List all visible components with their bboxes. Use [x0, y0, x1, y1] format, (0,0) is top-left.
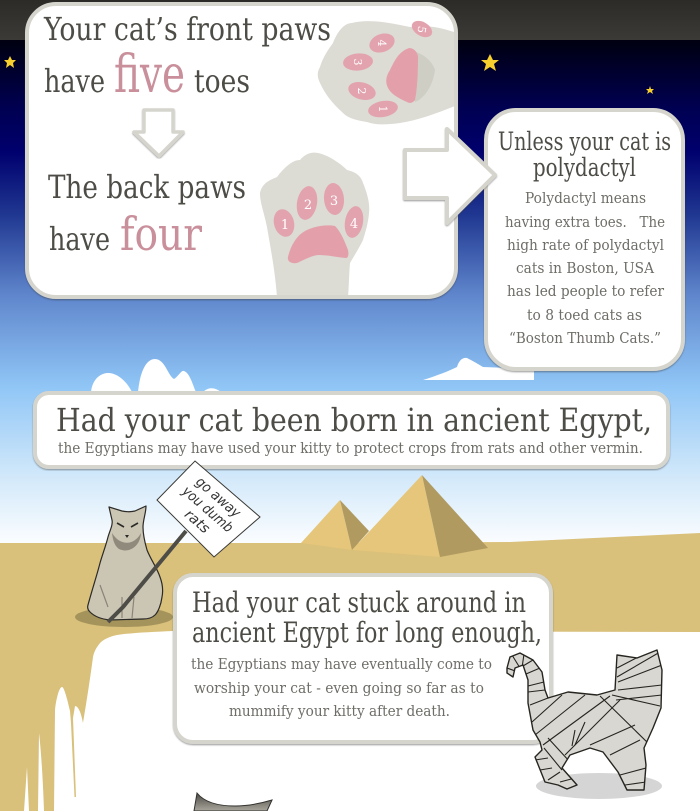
text: have four: have [49, 220, 110, 258]
pyramids [301, 475, 488, 557]
clouds [91, 358, 534, 392]
polydactyl body text: high rate of polydactyl [507, 236, 664, 254]
sign: go away [192, 474, 244, 522]
mummify heading [192, 586, 542, 649]
polydactyl body text: to 8 toed cats as [527, 306, 642, 324]
title: back paws: The back paws [48, 168, 246, 206]
icon: front paw: 3 [351, 58, 364, 66]
stars [4, 54, 654, 94]
polydactyl body text: has led people to refer [507, 282, 665, 300]
polydactyl body text: having extra toes. The [505, 213, 665, 231]
polydactyl body text: Polydactyl means [525, 189, 646, 207]
stick [108, 531, 186, 622]
text: have five toes: have [44, 62, 105, 100]
sign [157, 461, 260, 557]
icon: back paw: 4 [350, 217, 358, 232]
panel: polydactyl [486, 110, 683, 369]
mummify body text: the Egyptians may have eventually come to [191, 655, 492, 673]
title: front paws: Your cat’s front paws [43, 10, 331, 48]
banner subtext: the Egyptians may have used your kitty to protect crops from rats and other vermin. [58, 439, 643, 457]
panel: ancient Egypt banner [35, 393, 668, 467]
mummify body text [191, 655, 492, 720]
sign: rats [181, 507, 213, 537]
mummify heading: Had your cat stuck around in [192, 586, 526, 619]
text: have four [49, 207, 202, 261]
icon: back paw: 3 [330, 194, 338, 209]
icon: front paw: 1 [376, 106, 389, 112]
sign: you dumb [178, 483, 236, 536]
icon: front paw: 4 [375, 40, 388, 46]
mummify heading: ancient Egypt for long enough, [192, 616, 542, 649]
mummify body text: mummify your kitty after death. [229, 702, 450, 720]
mummify body text: worship your cat - even going so far as to [194, 679, 484, 697]
panel: mummify [175, 575, 551, 742]
text: have four: four [120, 207, 202, 261]
panel: paws [27, 4, 460, 297]
icon: front paw: 5 [414, 25, 428, 34]
icon: cat with sign [75, 461, 260, 627]
polydactyl body text [505, 189, 665, 347]
icon: back paw: 2 [304, 198, 312, 213]
text: have five toes: five [114, 45, 185, 105]
icon: back paw [260, 153, 369, 297]
polydactyl body text: cats in Boston, USA [516, 259, 654, 277]
polydactyl body text: “Boston Thumb Cats.” [509, 329, 661, 347]
sky background [0, 40, 700, 550]
icon: front paw: 2 [355, 88, 368, 94]
icon: mummy cat [507, 650, 662, 799]
polydactyl heading: polydactyl [533, 153, 636, 182]
arrow: down [134, 110, 183, 156]
text: have five toes: toes [194, 62, 250, 100]
icon: dark cat ears [194, 793, 272, 811]
top dark bar [0, 0, 700, 40]
text: have five toes [44, 45, 250, 105]
polydactyl heading [498, 127, 671, 182]
arrow: to polydactyl [405, 129, 495, 223]
icon: back paw: 1 [281, 218, 289, 233]
icon: front paw [318, 17, 460, 124]
sand ground [0, 533, 700, 811]
